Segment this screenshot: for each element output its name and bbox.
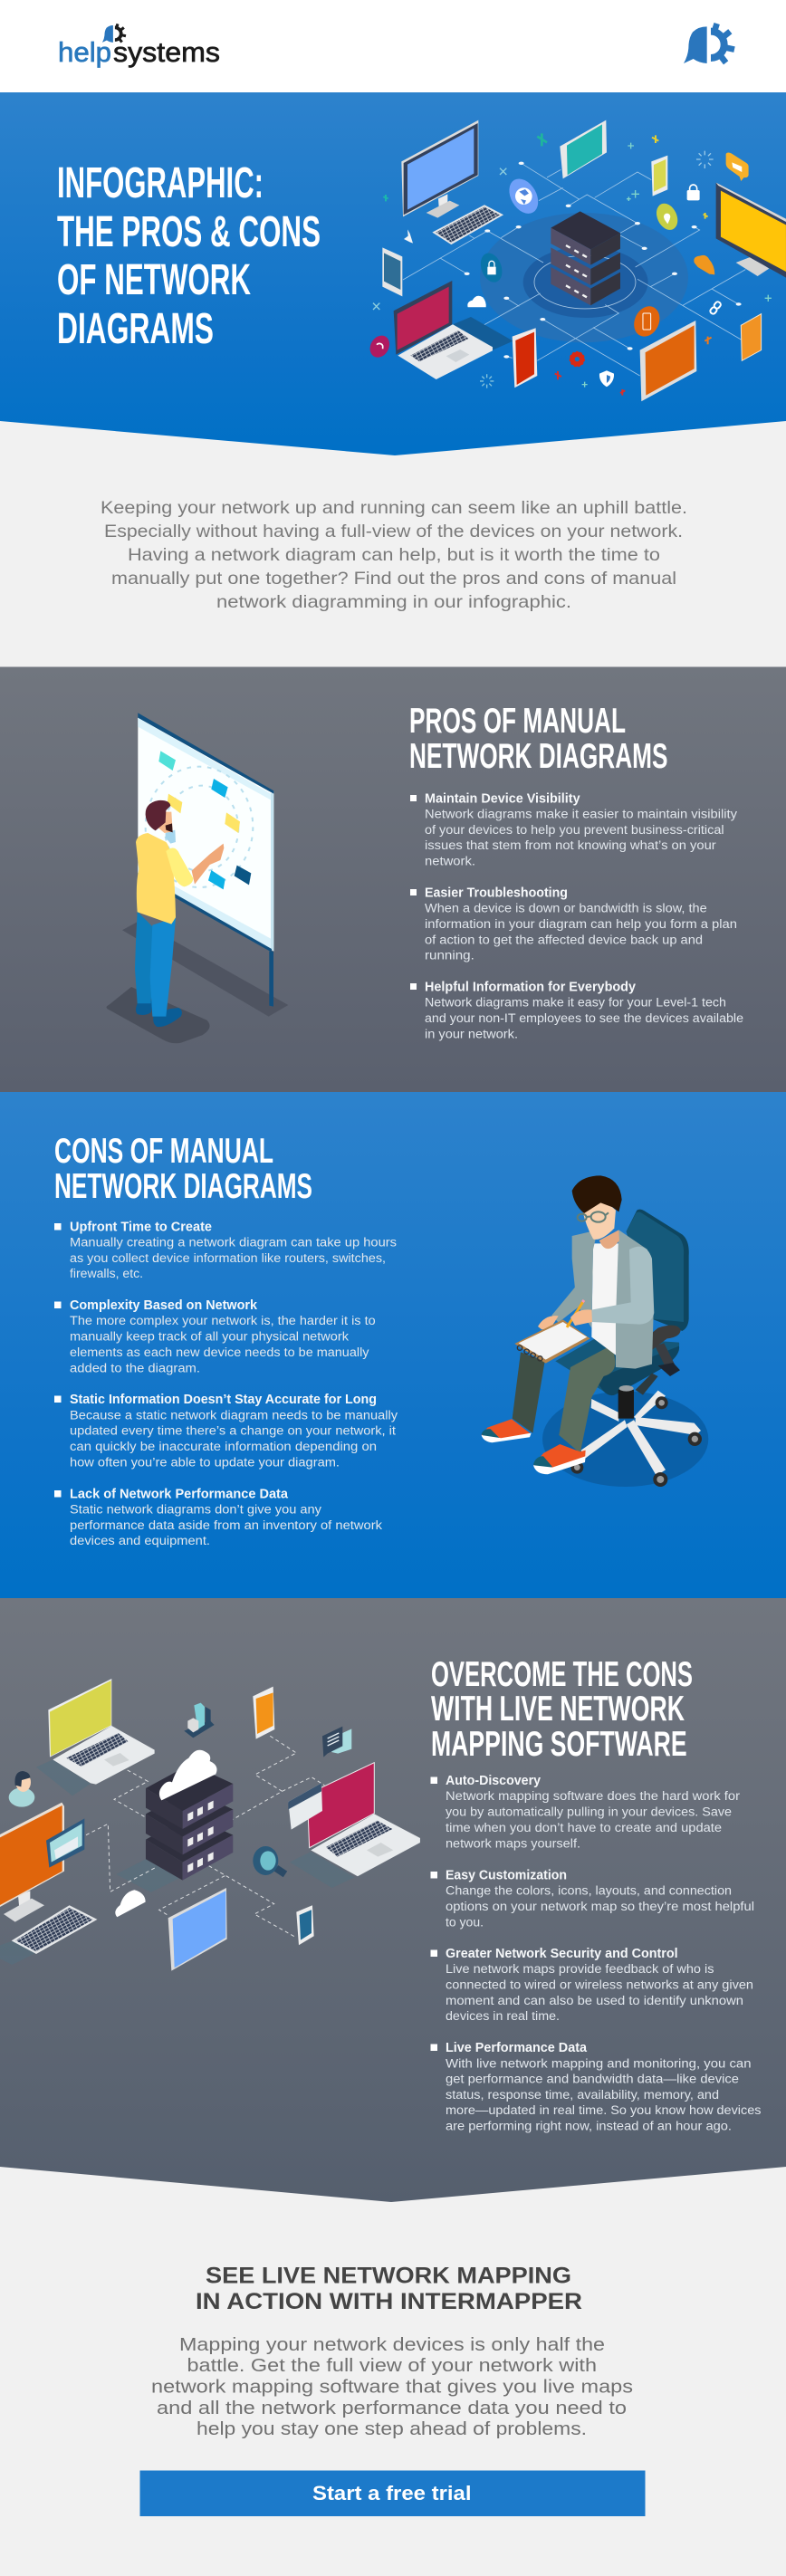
icon: orange monitor [0, 1803, 84, 1922]
list item: complexity: elements as each new device needs to be manually [70, 1345, 369, 1359]
list item: upfront time: firewalls, etc. [70, 1267, 143, 1280]
list item: helpful information: Helpful Information for Everybody [425, 980, 636, 994]
icon: yellow monitor [716, 183, 786, 278]
list item: upfront time: Manually creating a network diagram can take up hours [70, 1235, 397, 1250]
closing paragraph: help you stay one step ahead of problems. [196, 2419, 587, 2439]
decorative sparks [373, 133, 772, 396]
list item: easier troubleshooting: running. [425, 949, 474, 962]
title [57, 159, 321, 353]
icon: phone badge [629, 302, 665, 340]
icon: map pin badge [652, 200, 682, 234]
list item: helpful information: in your network. [425, 1027, 518, 1041]
list item: easy customization: options on your network map so they’re most helpful [446, 1900, 754, 1913]
list item: lack of performance data: Lack of Network Performance Data [70, 1487, 289, 1501]
heading: CONS OF MANUAL [54, 1132, 273, 1171]
icon: small cloud [115, 1890, 146, 1917]
icon: server with cloud [146, 1750, 233, 1881]
icon: blue monitor [401, 120, 478, 218]
list item: auto-discovery: time when you don’t have to create and update [446, 1821, 722, 1834]
list item: live performance data: more—updated in real time. So you know how devices [446, 2103, 762, 2117]
panel: overcome the cons [0, 1598, 786, 2202]
intro paragraph: Keeping your network up and running can seem like an uphill battle. [101, 498, 687, 518]
logo: helpsystems: systems [113, 36, 220, 68]
icon: server stack [551, 211, 620, 305]
list item: maintain device visibility: Maintain Device Visibility [425, 791, 580, 806]
icon: bar chart [184, 1703, 215, 1738]
list item: easier troubleshooting: When a device is down or bandwidth is slow, the [425, 902, 707, 915]
list item: auto-discovery: Network mapping software does the hard work for [446, 1789, 741, 1803]
icon: gear [570, 352, 584, 366]
list item: static information: Static Information Doesn’t Stay Accurate for Long [70, 1393, 377, 1407]
icon: blue phone [296, 1905, 314, 1945]
icon: crimson laptop [394, 281, 513, 379]
list item: easier troubleshooting: information in your diagram can help you form a plan [425, 917, 737, 931]
list item: easy customization [431, 1869, 754, 1929]
button: start a free trial [139, 2470, 645, 2516]
list item: maintain device visibility [410, 791, 737, 867]
title: INFOGRAPHIC: [57, 159, 264, 207]
icon: orange tablet [640, 321, 696, 401]
icon: orange cloud [694, 255, 714, 274]
list item: easier troubleshooting [410, 886, 737, 962]
icon: user [9, 1771, 34, 1807]
icon: yellow phone [651, 156, 667, 196]
list item: static information: can quickly be inaccurate information depending on [70, 1440, 377, 1453]
icon: red phone [513, 328, 537, 388]
list item: live performance data: With live network mapping and monitoring, you can [446, 2057, 752, 2070]
list item: lack of performance data [54, 1487, 382, 1547]
figure [482, 1175, 654, 1474]
man figure [135, 800, 224, 1027]
list item: complexity: added to the diagram. [70, 1362, 200, 1374]
list item: easy customization: Easy Customization [446, 1869, 567, 1883]
list item: auto-discovery [431, 1774, 741, 1851]
closing paragraph: Mapping your network devices is only half the [179, 2335, 605, 2355]
list item: maintain device visibility: of your devices to help you prevent business-critical [425, 823, 724, 837]
list item: auto-discovery: network maps yourself. [446, 1836, 580, 1851]
panel: hero [0, 92, 786, 455]
list item: static information: Because a static network diagram needs to be manually [70, 1409, 398, 1422]
icon: call badge [366, 332, 393, 361]
closing heading [196, 2264, 582, 2314]
heading [431, 1655, 693, 1764]
illustration: man in office chair [482, 1175, 708, 1487]
list item: security and control: Live network maps provide feedback of who is [446, 1962, 714, 1976]
intro paragraph: network diagramming in our infographic. [216, 592, 571, 612]
list item: security and control: moment and can also be used to identify unknown [446, 1994, 743, 2007]
list item: easy customization: Change the colors, icons, layouts, and connection [446, 1883, 732, 1898]
icon: teal tablet [560, 120, 607, 178]
list item: maintain device visibility: network. [425, 855, 475, 867]
icon: chat bubbles [322, 1727, 351, 1757]
icon: white cloud [467, 296, 486, 307]
list item: complexity: manually keep track of all your physical network [70, 1329, 349, 1344]
list item: lack of performance data: devices and equipment. [70, 1534, 210, 1547]
title: DIAGRAMS [57, 305, 214, 353]
list item: maintain device visibility: Network diagrams make it easier to maintain visibility [425, 808, 737, 820]
icon: yellow laptop [48, 1679, 155, 1785]
intro paragraph: Having a network diagram can help, but is it worth the time to [128, 545, 660, 565]
list item: auto-discovery: you by automatically pulling in your devices. Save [446, 1805, 732, 1818]
list item: complexity: Complexity Based on Network [70, 1298, 258, 1313]
heading: NETWORK DIAGRAMS [54, 1167, 312, 1206]
title: OF NETWORK [57, 256, 251, 304]
dashed connections [86, 1736, 324, 1938]
list item: security and control [431, 1947, 753, 2023]
icon: white lock [687, 185, 700, 200]
title: THE PROS & CONS [57, 208, 321, 256]
illustration: network of devices [366, 120, 786, 401]
list item: upfront time: Upfront Time to Create [70, 1221, 212, 1235]
closing heading: IN ACTION WITH INTERMAPPER [196, 2289, 582, 2314]
list item: live performance data: status, response time, availability, memory, and [446, 2088, 719, 2102]
heading [409, 702, 668, 776]
icon: small orange tablet [741, 314, 762, 360]
icon: blue phone [382, 247, 402, 296]
icon: shield [599, 370, 614, 387]
list item: complexity: The more complex your network is, the harder it is to [70, 1314, 376, 1327]
icon: magnifier [253, 1846, 285, 1875]
list item: live performance data [431, 2041, 762, 2133]
icon: crimson laptop with window [288, 1763, 420, 1876]
shadows [0, 1759, 355, 1965]
heading: PROS OF MANUAL [409, 702, 626, 741]
closing heading: SEE LIVE NETWORK MAPPING [206, 2264, 571, 2289]
list item: live performance data: Live Performance Data [446, 2041, 588, 2055]
panel: pros [0, 666, 786, 1092]
list item: upfront time [54, 1221, 397, 1280]
list item: helpful information [410, 980, 743, 1041]
icon: mail bubble [726, 152, 749, 181]
list item: helpful information: Network diagrams make it easy for your Level-1 tech [425, 996, 726, 1009]
button: start a free trial: Start a free trial [312, 2482, 471, 2504]
list item: security and control: connected to wired or wireless networks at any given [446, 1977, 753, 1992]
panel: cons [0, 1092, 786, 1598]
icon: keyboard [434, 206, 502, 244]
list item: lack of performance data: performance data aside from an inventory of network [70, 1518, 382, 1532]
list item: lack of performance data: Static network diagrams don’t give you any [70, 1503, 321, 1516]
list item: security and control: Greater Network Security and Control [446, 1947, 678, 1961]
heading [54, 1132, 312, 1206]
icon: orange phone [253, 1687, 274, 1739]
intro paragraph: manually put one together? Find out the pros and cons of manual [111, 569, 676, 589]
icon: lock badge [477, 250, 506, 285]
illustration: network mapping devices [0, 1679, 420, 1971]
list item: security and control: devices in real time. [446, 2009, 560, 2023]
chair [555, 1210, 702, 1487]
closing paragraph [151, 2335, 633, 2439]
list item: live performance data: are performing right now, instead of an hour ago. [446, 2119, 732, 2133]
list item: upfront time: as you collect device information like routers, switches, [70, 1251, 386, 1265]
list item: static information: how often you’re able to update your diagram. [70, 1456, 340, 1469]
list item: static information [54, 1393, 398, 1469]
closing paragraph: and all the network performance data you need to [157, 2399, 627, 2418]
list item: helpful information: and your non-IT employees to see the devices available [425, 1011, 743, 1025]
intro paragraph: Especially without having a full-view of the devices on your network. [104, 522, 683, 541]
list item: auto-discovery: Auto-Discovery [446, 1774, 541, 1788]
closing paragraph: network mapping software that gives you live maps [151, 2378, 633, 2398]
list item: maintain device visibility: issues that stem from not knowing what’s on your [425, 838, 716, 852]
icon: globe [503, 174, 544, 219]
logo: helpsystems: help [58, 36, 111, 68]
list item: easier troubleshooting: Easier Troubleshooting [425, 886, 568, 900]
list item: static information: updated every time there’s a change on your network, it [70, 1423, 396, 1438]
logo: helpsystems [58, 24, 220, 68]
closing paragraph: battle. Get the full view of your network with [187, 2356, 597, 2376]
list item: live performance data: get performance and bandwidth data—like device [446, 2072, 739, 2086]
list item: easier troubleshooting: of action to get the affected device back up and [425, 933, 703, 947]
list item: easy customization: to you. [446, 1916, 484, 1929]
header bar [0, 0, 786, 92]
icon: blue tablet [168, 1888, 227, 1971]
list item: complexity [54, 1298, 376, 1374]
icon: keyboard [14, 1907, 95, 1953]
heading: NETWORK DIAGRAMS [409, 737, 668, 776]
intro paragraph [101, 498, 687, 612]
icon: chain link [709, 301, 722, 315]
illustration: man at whiteboard [106, 713, 288, 1043]
icon: white wrench [404, 229, 413, 244]
icon: speech bubble and gear [684, 24, 734, 63]
